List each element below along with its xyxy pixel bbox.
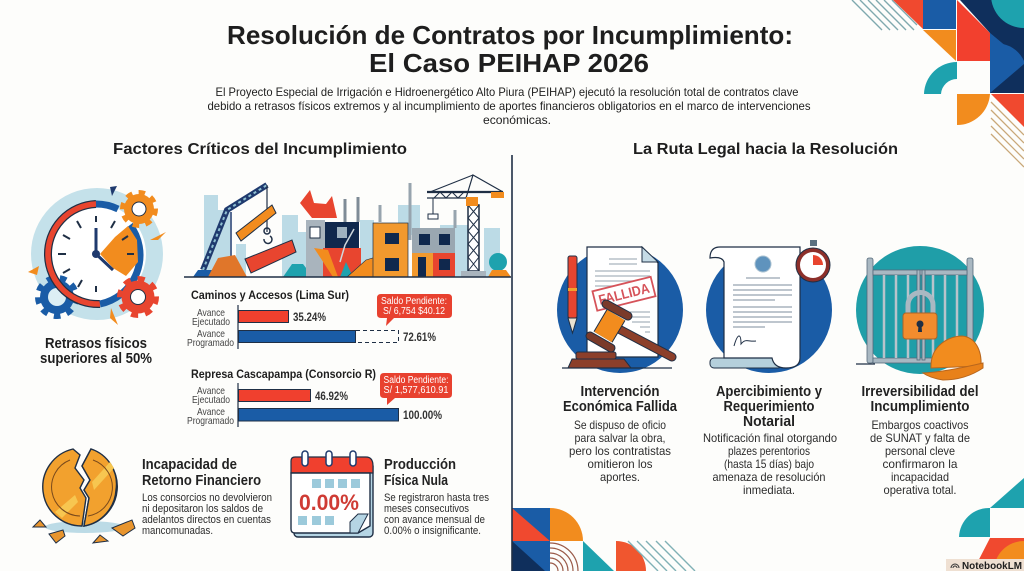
text: produccion fisica nula: con avance mensual de [384, 514, 485, 526]
text: incapacidad de retorno financiero: adelantos directos en cuentas [142, 514, 271, 526]
row labels: Avance [197, 328, 225, 340]
text: incapacidad de retorno financiero: ni depositaron los saldos de [142, 503, 263, 515]
text: produccion fisica nula: 0.00% o insignificante. [384, 525, 481, 537]
intro text: El Proyecto Especial de Irrigación e Hidroenergético Alto Piura (PEIHAP) ejecutó la resolución total de contratos clave [216, 85, 799, 99]
text: incapacidad de retorno financiero: Los consorcios no devolvieron [142, 492, 272, 504]
bar: programado [238, 330, 356, 342]
text: intervencion economica fallida: Se dispuso de oficio [574, 418, 666, 432]
text: apercibimiento: amenaza de resolución [712, 470, 826, 484]
title [227, 20, 793, 78]
callout: saldo pendiente: S/ 6,754 $40.12 [383, 306, 445, 317]
illustration: construction scene [184, 175, 511, 277]
text: irreversibilidad: de SUNAT y falta de [870, 431, 970, 445]
icon: broken coin [33, 449, 135, 543]
heading: factores criticos: Factores Críticos del Incumplimiento [113, 141, 407, 158]
text: apercibimiento: Notificación final otorgando [703, 431, 837, 445]
text: produccion fisica nula [384, 457, 489, 537]
row labels: Ejecutado [192, 316, 230, 328]
text: retrasos fisicos [40, 336, 152, 367]
chart: represa cascapampa [187, 367, 452, 427]
gear: red [120, 278, 156, 316]
decoration: bottom left geometric pattern [512, 508, 695, 571]
text: irreversibilidad [862, 384, 978, 497]
tree [488, 253, 511, 277]
text: apercibimiento: Notarial [743, 414, 795, 430]
bar: ejecutado [238, 310, 288, 322]
text: intervencion economica fallida: para salvar la obra, [574, 431, 666, 445]
text: apercibimiento: Requerimiento [724, 399, 815, 415]
icon: calendar 0.00%: 0.00% [299, 490, 359, 515]
gear: orange [122, 192, 156, 226]
padlock [903, 292, 937, 339]
row labels: Programado [187, 415, 234, 427]
text: produccion fisica nula: meses consecutivos [384, 503, 469, 515]
value: 35.24% [293, 310, 326, 324]
row labels: Avance [197, 307, 225, 319]
row labels: Avance [197, 385, 225, 397]
helmet [923, 336, 983, 380]
stamp: fallida: FALLIDA [597, 280, 651, 308]
text: produccion fisica nula: Física Nula [384, 473, 449, 489]
stopwatch [796, 240, 830, 282]
row labels: Ejecutado [192, 394, 230, 406]
text: apercibimiento: plazes perentorios [728, 444, 810, 458]
heading: ruta legal: La Ruta Legal hacia la Resolución [633, 141, 898, 158]
text: apercibimiento [703, 384, 837, 497]
intro text: económicas. [483, 113, 551, 127]
tower crane [427, 175, 504, 277]
value: 46.92% [315, 389, 348, 403]
icon: broken clock with gears [28, 186, 166, 325]
text: apercibimiento: inmediata. [743, 483, 795, 497]
text: incapacidad de retorno financiero: Retorno Financiero [142, 473, 261, 489]
intro text: debido a retrasos físicos extremos y al incumplimiento de aportes financieros obligatorios en el marco de intervenciones [208, 99, 810, 113]
ruined building [300, 190, 392, 277]
callout: saldo pendiente [377, 294, 452, 326]
text: irreversibilidad: confirmaron la [882, 457, 958, 471]
row labels [187, 385, 234, 427]
text: produccion fisica nula: Se registraron hasta tres [384, 492, 489, 504]
icon: calendar 0.00% [291, 451, 373, 537]
text: intervencion economica fallida [563, 384, 678, 484]
text: intervencion economica fallida: Intervención [580, 384, 660, 400]
callout: saldo pendiente: Saldo Pendiente: [384, 375, 448, 386]
bar: programado [238, 408, 398, 421]
icon: notarial document and stopwatch [706, 240, 832, 373]
row labels: Programado [187, 337, 234, 349]
text: apercibimiento: (hasta 15 días) bajo [724, 457, 814, 471]
text: intervencion economica fallida: Económica Fallida [563, 399, 678, 415]
callout: saldo pendiente: S/ 1,577,610.91 [384, 385, 449, 396]
value: 100.00% [403, 408, 442, 422]
text: retrasos fisicos: superiores al 50% [40, 351, 152, 367]
text: intervencion economica fallida: omitieron los [588, 457, 652, 471]
intro text [208, 85, 810, 127]
row labels: Avance [197, 406, 225, 418]
text: apercibimiento: Apercibimiento y [716, 384, 822, 400]
icon: locked gate and helmet [856, 246, 984, 380]
bar: ejecutado [238, 390, 310, 402]
text: irreversibilidad: Incumplimiento [870, 399, 970, 415]
text: irreversibilidad: incapacidad [891, 470, 949, 484]
chart: caminos y accesos [187, 288, 452, 349]
text: incapacidad de retorno financiero [142, 457, 272, 537]
callout: saldo pendiente: Saldo Pendiente: [381, 296, 447, 307]
text: intervencion economica fallida: aportes. [600, 470, 640, 484]
decoration: bottom right geometric pattern [959, 478, 1024, 571]
text: produccion fisica nula: Producción [384, 457, 456, 473]
row labels [187, 307, 234, 349]
pen [568, 256, 577, 333]
gavel [562, 304, 672, 368]
gear: blue [38, 278, 76, 316]
icon: failed intervention document and gavel [557, 247, 683, 373]
text: irreversibilidad: Irreversibilidad del [862, 384, 978, 400]
text: irreversibilidad: personal cleve [885, 444, 955, 458]
text: retrasos fisicos: Retrasos físicos [45, 336, 147, 352]
decoration: top right geometric pattern [852, 0, 1024, 167]
crane [193, 185, 272, 277]
title: Resolución de Contratos por Incumplimiento: [227, 20, 793, 50]
text: irreversibilidad: Embargos coactivos [872, 418, 968, 432]
value: 72.61% [403, 330, 436, 344]
bar: dashed remainder [356, 330, 398, 342]
title: El Caso PEIHAP 2026 [369, 48, 649, 78]
text: incapacidad de retorno financiero: mancomunadas. [142, 525, 213, 537]
text: irreversibilidad: operativa total. [884, 483, 956, 497]
text: incapacidad de retorno financiero: Incapacidad de [142, 457, 237, 473]
callout: saldo pendiente [380, 373, 452, 405]
text: intervencion economica fallida: pero los contratistas [569, 444, 671, 458]
orange and grey buildings [373, 183, 455, 277]
chart title: Caminos y Accesos (Lima Sur) [191, 288, 349, 302]
chart title: Represa Cascapampa (Consorcio R) [191, 367, 376, 381]
